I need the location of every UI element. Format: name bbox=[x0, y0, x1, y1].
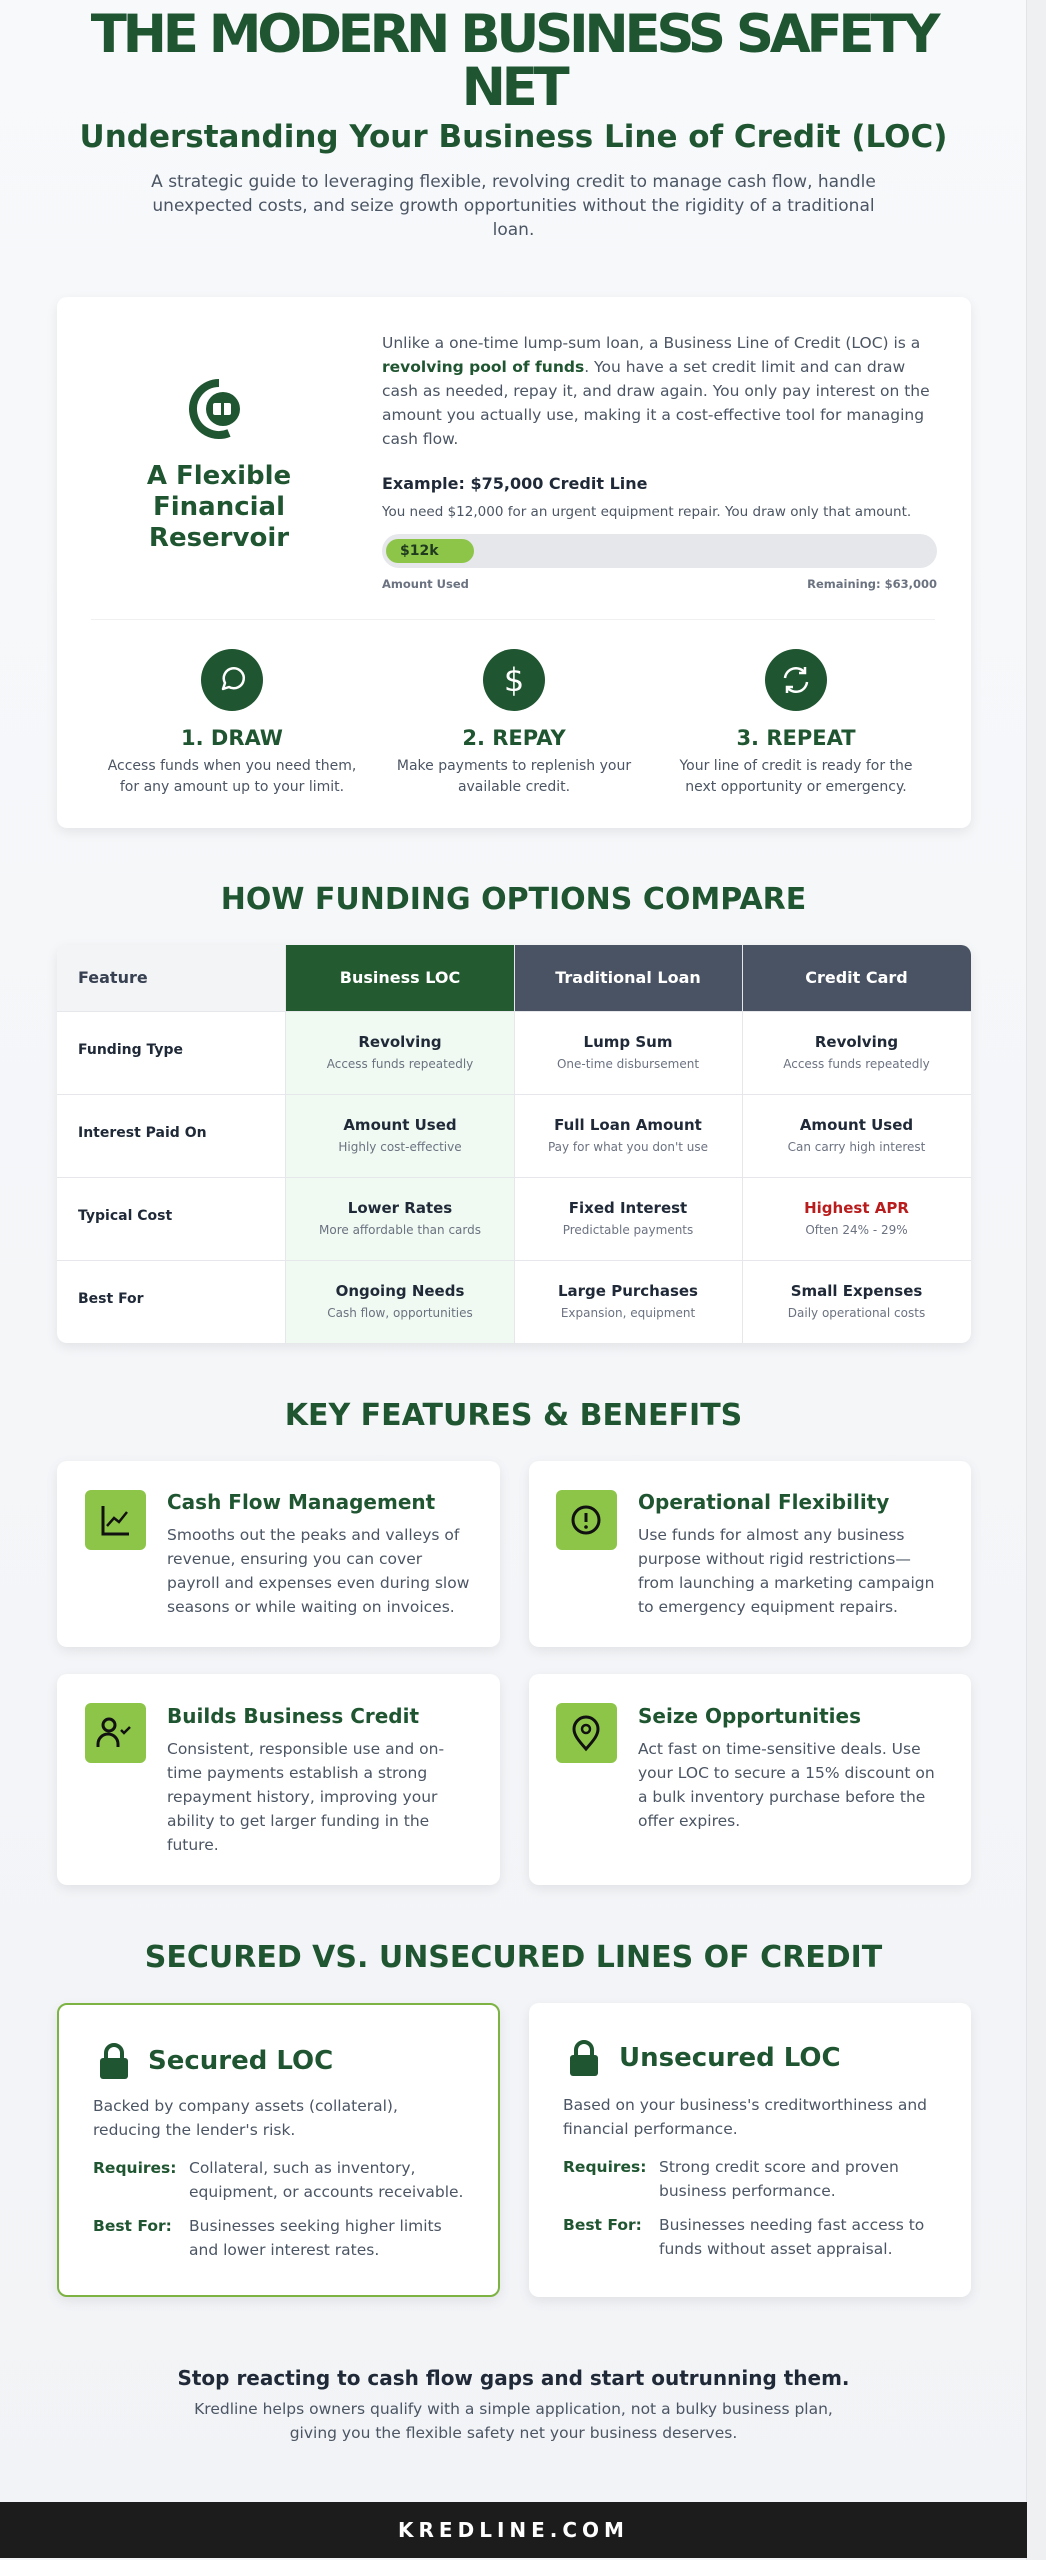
card: cash flow: Cash Flow Management bbox=[167, 1490, 435, 1514]
step: repeat bbox=[679, 649, 913, 795]
row: cost bbox=[78, 1199, 909, 1237]
row: interest: Highly cost-effective bbox=[338, 1140, 462, 1154]
heading: secured vs unsecured: SECURED VS. UNSECURED LINES OF CREDIT bbox=[145, 1940, 882, 1975]
bar labels: Remaining: $63,000 bbox=[807, 577, 937, 591]
row: cost: More affordable than cards bbox=[319, 1223, 481, 1237]
example heading: Example: $75,000 Credit Line bbox=[382, 474, 647, 493]
step: repay: Make payments to replenish your bbox=[397, 758, 631, 774]
row: interest bbox=[78, 1116, 926, 1154]
card: opportunities: Seize Opportunities bbox=[638, 1704, 861, 1728]
row: funding type: One-time disbursement bbox=[557, 1057, 699, 1071]
step: repeat: Your line of credit is ready for the bbox=[679, 758, 913, 774]
heading: compare: HOW FUNDING OPTIONS COMPARE bbox=[221, 882, 806, 917]
row: best for: Expansion, equipment bbox=[561, 1306, 695, 1320]
card: unsecured bbox=[529, 2003, 971, 2297]
table: comparison bbox=[57, 945, 971, 1343]
progress bar: $12k bbox=[400, 543, 439, 559]
bar labels: Amount Used bbox=[382, 577, 469, 591]
bar labels bbox=[382, 577, 937, 591]
step: draw: Access funds when you need them, bbox=[108, 758, 356, 774]
step: repeat: next opportunity or emergency. bbox=[685, 779, 907, 795]
icon: chart bbox=[85, 1490, 146, 1550]
card: cash flow bbox=[57, 1461, 500, 1647]
row: interest: Interest Paid On bbox=[78, 1125, 207, 1141]
row: cost: Predictable payments bbox=[563, 1223, 693, 1237]
step: repay: available credit. bbox=[458, 779, 570, 795]
panel: flexible reservoir bbox=[57, 297, 971, 828]
row: cost: Often 24% - 29% bbox=[805, 1223, 908, 1237]
row: funding type: Access funds repeatedly bbox=[783, 1057, 930, 1071]
footer bbox=[0, 2502, 1027, 2558]
card: unsecured: Requires: bbox=[563, 2158, 646, 2176]
table header: Business LOC bbox=[340, 968, 460, 987]
card: secured: Backed by company assets (collateral), reducing the lender's risk. bbox=[93, 2097, 398, 2139]
progress bar bbox=[382, 534, 937, 568]
card: secured: Secured LOC bbox=[148, 2046, 333, 2076]
icon: dollar: $ bbox=[504, 661, 524, 699]
call to action bbox=[177, 2366, 850, 2442]
title bbox=[91, 4, 941, 118]
subtitle: Understanding Your Business Line of Credit (LOC) bbox=[80, 119, 947, 155]
row: best for bbox=[78, 1282, 925, 1320]
call to action: Stop reacting to cash flow gaps and start outrunning them. bbox=[177, 2366, 850, 2390]
card: flexibility: Use funds for almost any business purpose without rigid restrictions—from launching a marketing campaign to emergency equipment repairs. bbox=[638, 1526, 934, 1616]
icon: dollar bbox=[483, 649, 545, 711]
call to action: giving you the flexible safety net your business deserves. bbox=[290, 2424, 737, 2442]
card: unsecured: Based on your business's creditworthiness and financial performance. bbox=[563, 2096, 927, 2138]
title: THE MODERN BUSINESS SAFETY bbox=[91, 4, 936, 65]
row: cost: Highest APR bbox=[804, 1199, 909, 1217]
row: funding type: Funding Type bbox=[78, 1042, 183, 1058]
step: draw: 1. DRAW bbox=[181, 726, 283, 750]
row: interest: Amount Used bbox=[800, 1116, 913, 1134]
icon: reservoir bbox=[189, 379, 240, 439]
icon: user check bbox=[85, 1703, 146, 1763]
row: interest: Can carry high interest bbox=[788, 1140, 925, 1154]
card: unsecured: Best For: bbox=[563, 2216, 642, 2234]
title: NET bbox=[462, 57, 565, 118]
card: unsecured: Businesses needing fast access to funds without asset appraisal. bbox=[659, 2216, 924, 2258]
example text: You need $12,000 for an urgent equipment repair. You draw only that amount. bbox=[382, 504, 911, 520]
heading: features: KEY FEATURES & BENEFITS bbox=[285, 1398, 742, 1433]
icon: alert bbox=[556, 1490, 617, 1550]
card: secured: Businesses seeking higher limits and lower interest rates. bbox=[189, 2217, 442, 2259]
step: draw bbox=[108, 649, 356, 795]
card: unsecured: Unsecured LOC bbox=[619, 2043, 841, 2073]
card: credit bbox=[57, 1674, 500, 1885]
row: interest: Full Loan Amount bbox=[554, 1116, 702, 1134]
row: interest: Amount Used bbox=[343, 1116, 457, 1134]
card: secured: Collateral, such as inventory, equipment, or accounts receivable. bbox=[189, 2159, 463, 2201]
intro text: A strategic guide to leveraging flexible, revolving credit to manage cash flow, handle unexpected costs, and seize growth opportunities without the rigidity of a traditional loan. bbox=[151, 172, 876, 240]
card: secured: Best For: bbox=[93, 2217, 172, 2235]
row: best for: Best For bbox=[78, 1291, 144, 1307]
row: best for: Ongoing Needs bbox=[336, 1282, 464, 1300]
card: secured: Requires: bbox=[93, 2159, 176, 2177]
card: cash flow: Smooths out the peaks and valleys of revenue, ensuring you can cover payroll and expenses even during slow seasons or while waiting on invoices. bbox=[167, 1526, 469, 1616]
table header: Traditional Loan bbox=[555, 968, 701, 987]
card: flexibility: Operational Flexibility bbox=[638, 1490, 889, 1514]
table header: Credit Card bbox=[805, 968, 908, 987]
table header bbox=[78, 968, 908, 987]
row: best for: Small Expenses bbox=[791, 1282, 922, 1300]
card: unsecured: Strong credit score and proven business performance. bbox=[659, 2158, 899, 2200]
card: flexibility bbox=[529, 1461, 971, 1647]
row: funding type: Lump Sum bbox=[584, 1033, 672, 1051]
step: repeat: 3. REPEAT bbox=[736, 726, 856, 750]
step: draw: for any amount up to your limit. bbox=[120, 779, 344, 795]
row: interest: Pay for what you don't use bbox=[548, 1140, 708, 1154]
card: opportunities: Act fast on time-sensitive deals. Use your LOC to secure a 15% discount on a bulk inventory purchase before the offer expires. bbox=[638, 1740, 935, 1830]
card: credit: Builds Business Credit bbox=[167, 1704, 419, 1728]
icon: lock bbox=[570, 2040, 598, 2076]
icon: chat bbox=[201, 649, 263, 711]
row: best for: Cash flow, opportunities bbox=[327, 1306, 473, 1320]
row: funding type: Revolving bbox=[815, 1033, 898, 1051]
icon: cycle bbox=[765, 649, 827, 711]
footer: KREDLINE.COM bbox=[398, 2518, 629, 2542]
row: best for: Large Purchases bbox=[558, 1282, 698, 1300]
icon: pin bbox=[556, 1703, 617, 1763]
row: cost: Lower Rates bbox=[348, 1199, 452, 1217]
card: credit: Consistent, responsible use and on-time payments establish a strong repayment history, improving your ability to get larger funding in the future. bbox=[167, 1740, 444, 1854]
text: explanation: Unlike a one-time lump-sum loan, a Business Line of Credit (LOC) is a revolving pool of funds. You have a set credit limit and can draw cash as needed, repay it, and draw again. You only pay interest on the amount you actually use, making it a cost-effective tool for managing cash flow. bbox=[382, 334, 930, 448]
step: repay: 2. REPAY bbox=[462, 726, 566, 750]
table header: Feature bbox=[78, 968, 148, 987]
card: secured bbox=[57, 2003, 500, 2297]
heading: reservoir: A Flexible Financial Reservoir bbox=[147, 461, 291, 553]
row: cost: Typical Cost bbox=[78, 1208, 172, 1224]
row: funding type: Revolving bbox=[358, 1033, 442, 1051]
call to action: Kredline helps owners qualify with a simple application, not a bulky business plan, bbox=[194, 2400, 833, 2418]
row: cost: Fixed Interest bbox=[569, 1199, 687, 1217]
card: opportunities bbox=[529, 1674, 971, 1885]
step: repay bbox=[397, 649, 632, 795]
row: funding type: Access funds repeatedly bbox=[327, 1057, 473, 1071]
row: best for: Daily operational costs bbox=[788, 1306, 925, 1320]
icon: lock bbox=[100, 2043, 128, 2079]
row: funding type bbox=[78, 1033, 930, 1071]
